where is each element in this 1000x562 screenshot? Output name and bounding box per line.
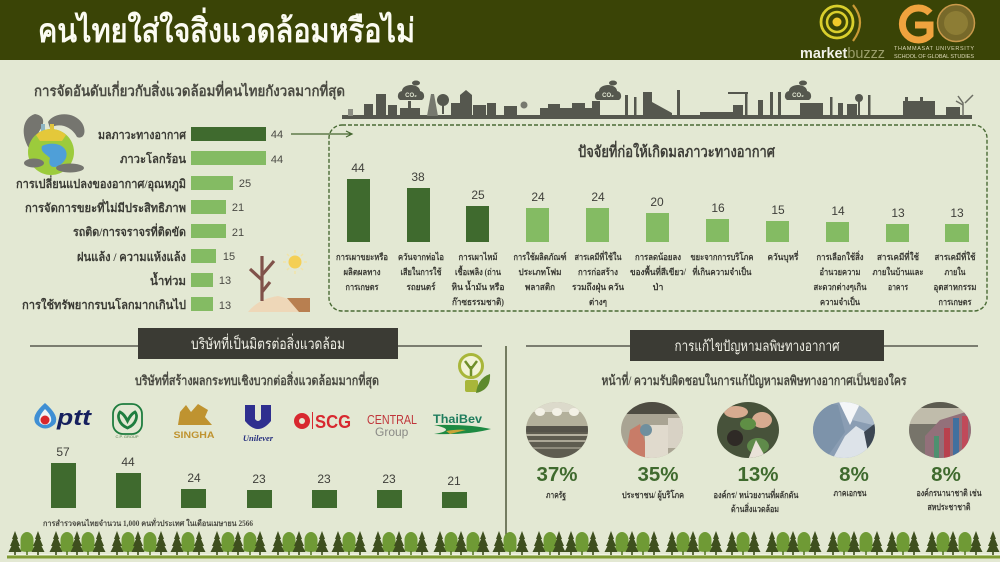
logo: Central Group: CENTRAL xyxy=(367,412,417,427)
factor 11: การเกษตร xyxy=(938,297,972,307)
logo: Central Group: Group xyxy=(375,425,409,439)
factor 11: สารเคมีที่ใช้ xyxy=(934,250,976,262)
factor 6 xyxy=(630,195,686,292)
bar PTT: 57 xyxy=(56,445,70,459)
section heading: eco-friendly companies xyxy=(138,328,398,359)
row 4: 21 xyxy=(232,202,244,214)
logo: Thammasat School of Global Studies xyxy=(894,4,974,60)
row 2 xyxy=(120,151,283,166)
factor 1: การเกษตร xyxy=(346,282,379,292)
icon: dry land xyxy=(248,250,310,312)
item: organisations: 13% xyxy=(737,463,779,486)
responsibility items xyxy=(525,400,982,514)
factor 10: สารเคมีที่ใช้ xyxy=(877,250,919,262)
logo: PTT xyxy=(34,403,93,430)
bar ThaiBev: 21 xyxy=(447,474,461,488)
logo: Unilever: Unilever xyxy=(243,433,274,443)
factor 6: การลดน้อยลง xyxy=(635,252,681,262)
city skyline illustration: CO₂ xyxy=(602,93,614,99)
factor 3: หิน น้ำมัน หรือ xyxy=(451,280,504,292)
logo: Central Group xyxy=(367,412,417,439)
factor 10: 13 xyxy=(891,206,905,220)
factor 7 xyxy=(690,201,754,277)
row 5 xyxy=(73,223,244,239)
factor 2 xyxy=(398,170,444,292)
logo: Thammasat School of Global Studies: THAMMASAT UNIVERSITY xyxy=(894,46,974,52)
row 4 xyxy=(25,199,244,215)
factor 7: ที่เกินความจำเป็น xyxy=(692,265,752,277)
factor 11: 13 xyxy=(950,206,964,220)
factor 9: 14 xyxy=(831,204,845,218)
icon: green bulb xyxy=(460,354,490,393)
factor 1: 44 xyxy=(351,161,365,175)
logo: CP Group xyxy=(113,404,142,439)
item: government: 37% xyxy=(536,463,578,486)
logo: Singha xyxy=(174,404,215,440)
bar SCG: 23 xyxy=(317,472,331,486)
factor 10: ภายในบ้านและ xyxy=(872,266,924,277)
factor 4: การใช้ผลิตภัณฑ์ xyxy=(514,251,566,262)
row 1: มลภาวะทางอากาศ xyxy=(98,128,186,142)
panel heading: ปัจจัยที่ก่อให้เกิดมลภาวะทางอากาศ xyxy=(578,140,776,161)
logo: SCG: SCG xyxy=(315,412,351,432)
section heading: air pollution solutions xyxy=(630,330,884,361)
row 1: 44 xyxy=(271,129,283,141)
item: public xyxy=(620,400,686,501)
row 1 xyxy=(98,127,283,142)
logo: ThaiBev: ThaiBev xyxy=(433,412,482,426)
row 4: การจัดการขยะที่ไม่มีประสิทธิภาพ xyxy=(25,199,186,215)
panel: causes of air pollution xyxy=(329,125,987,311)
company logos xyxy=(34,403,491,443)
factor 4: 24 xyxy=(531,190,545,204)
factor 5: การก่อสร้าง xyxy=(578,267,618,277)
factor 10: อาคาร xyxy=(888,282,908,292)
bar Singha xyxy=(181,471,206,508)
factor 5: 24 xyxy=(591,190,605,204)
row 6 xyxy=(77,249,235,264)
factor 1 xyxy=(336,161,388,292)
bar CP: 44 xyxy=(121,455,135,469)
item: government: ภาครัฐ xyxy=(546,490,566,501)
factor 9: สะดวกต่างๆเกิน xyxy=(814,282,867,293)
factor 8: 15 xyxy=(771,203,785,217)
subheading: responsibility: หน้าที่/ ความรับผิดชอบในการแก้ปัญหามลพิษทางอากาศเป็นของใคร xyxy=(602,371,907,389)
logo: Unilever xyxy=(243,405,274,443)
bar CP xyxy=(116,455,141,508)
factor 9: ความจำเป็น xyxy=(820,295,861,307)
title: คนไทยใส่ใจสิ่งแวดล้อมหรือไม่ xyxy=(38,7,415,50)
factor 6: ของพื้นที่สีเขียว/ xyxy=(630,265,686,277)
bar Unilever xyxy=(247,472,272,508)
logo: marketbuzzz: marketbuzzz xyxy=(800,45,885,62)
row 3: 25 xyxy=(239,178,251,190)
ranking heading: การจัดอันดับเกี่ยวกับสิ่งแวดล้อมที่คนไทยกังวลมากที่สุด xyxy=(34,80,345,100)
bar Unilever: 23 xyxy=(252,472,266,486)
chart: company scores xyxy=(51,445,467,508)
factor 7: ขยะจากการบริโภค xyxy=(690,251,754,262)
row 5: รถติด/การจราจรที่ติดขัด xyxy=(73,223,186,239)
section heading: eco-friendly companies: บริษัทที่เป็นมิตรต่อสิ่งแวดล้อม xyxy=(191,333,345,353)
item: public: 35% xyxy=(637,463,679,486)
row 3 xyxy=(16,175,251,192)
factor 5 xyxy=(572,190,625,308)
factor 1: การเผาขยะหรือ xyxy=(336,251,388,262)
logo: SCG xyxy=(294,412,351,432)
logo: CP Group: C.P. GROUP xyxy=(115,434,139,439)
bar Central: 23 xyxy=(382,472,396,486)
factor 8 xyxy=(766,203,799,263)
row 7 xyxy=(150,271,231,288)
factor 2: รถยนตร์ xyxy=(406,281,436,292)
factor 8: ควันบุหรี่ xyxy=(768,250,799,263)
row 7: น้ำท่วม xyxy=(150,271,186,288)
factor 9: การเลือกใช้สิ่ง xyxy=(816,250,864,262)
factor 4: ประเภทโฟม xyxy=(518,266,562,277)
subheading: companies: บริษัทที่สร้างผลกระทบเชิงบวกต่อสิ่งแวดล้อมมากที่สุด xyxy=(135,371,379,389)
item: public: ประชาชน/ ผู้บริโภค xyxy=(622,489,684,501)
row 6: 15 xyxy=(223,251,235,263)
bar SCG xyxy=(312,472,337,508)
factor 5: รวมถึงฝุ่น ควัน xyxy=(572,282,625,293)
factor 4 xyxy=(514,190,566,292)
logo: PTT: ptt xyxy=(56,405,93,430)
logo: ThaiBev xyxy=(433,412,491,434)
factor 5: สารเคมีที่ใช้ใน xyxy=(574,250,622,262)
city skyline illustration: CO₂ xyxy=(792,93,804,99)
item: organisations xyxy=(714,400,799,514)
bar Central xyxy=(377,472,402,508)
factor 11 xyxy=(934,206,977,307)
item: international bodies: องค์กรนานาชาติ เช่น xyxy=(916,487,982,498)
bar Singha: 24 xyxy=(187,471,201,485)
survey footnote: การสำรวจคนไทยจำนวน 1,000 คนทั่วประเทศ ในเดือนเมษายน 2566 xyxy=(43,517,253,528)
city skyline illustration: CO₂ xyxy=(405,93,417,99)
tree line xyxy=(7,531,1000,558)
factor 3: ก๊าซธรรมชาติ) xyxy=(452,297,504,307)
factor 3: เชื้อเพลิง (ถ่าน xyxy=(455,265,502,277)
item: organisations: องค์กร/ หน่วยงานที่ผลักดัน xyxy=(714,488,799,500)
row 8: 13 xyxy=(219,300,231,312)
item: government xyxy=(525,400,589,501)
item: organisations: ด้านสิ่งแวดล้อม xyxy=(731,502,779,514)
factor 11: ภายใน xyxy=(944,266,966,277)
section heading: air pollution solutions: การแก้ไขปัญหามลพิษทางอากาศ xyxy=(674,337,840,355)
factor 1: ผลิตผลทาง xyxy=(344,267,380,277)
factor 2: ควันจากท่อไอ xyxy=(398,251,444,262)
factor 11: อุตสาหกรรม xyxy=(934,282,977,293)
chart: environmental concerns ranking xyxy=(16,127,283,312)
factor 2: 38 xyxy=(411,170,425,184)
item: private sector: ภาคเอกชน xyxy=(834,488,867,498)
factor 2: เสียในการใช้ xyxy=(400,266,442,277)
row 5: 21 xyxy=(232,227,244,239)
factor 3: การเผาไหม้ xyxy=(458,251,498,262)
factor 9 xyxy=(814,204,867,307)
logo: Singha: SINGHA xyxy=(174,430,215,440)
item: international bodies: 8% xyxy=(931,463,961,486)
icon: polluted earth xyxy=(24,114,84,175)
factor 3: 25 xyxy=(471,188,485,202)
arrow to panel xyxy=(291,131,352,137)
row 6: ฝนแล้ง / ความแห้งแล้ง xyxy=(77,250,186,264)
row 8: การใช้ทรัพยากรบนโลกมากเกินไป xyxy=(22,297,186,312)
factor 6: ป่า xyxy=(653,282,663,292)
factor 9: อำนวยความ xyxy=(820,267,861,277)
row 7: 13 xyxy=(219,275,231,287)
city skyline illustration xyxy=(342,80,973,119)
item: private sector xyxy=(811,400,877,498)
factor 4: พลาสติก xyxy=(525,282,555,292)
row 3: การเปลี่ยนแปลงของอากาศ/อุณหภูมิ xyxy=(16,175,186,192)
row 2: ภาวะโลกร้อน xyxy=(120,151,187,166)
bar PTT xyxy=(51,445,76,508)
factor 10 xyxy=(872,206,924,292)
factor 6: 20 xyxy=(650,195,664,209)
factor 5: ต่างๆ xyxy=(589,297,607,308)
header band xyxy=(0,0,1000,60)
item: international bodies: สหประชาชาติ xyxy=(928,502,971,512)
logo: Thammasat School of Global Studies: SCHOOL OF GLOBAL STUDIES xyxy=(894,54,974,60)
row 2: 44 xyxy=(271,154,283,166)
item: private sector: 8% xyxy=(839,463,869,486)
item: international bodies xyxy=(907,400,982,512)
factor 3 xyxy=(451,188,504,307)
factor 7: 16 xyxy=(711,201,725,215)
bar ThaiBev xyxy=(442,474,467,508)
logo: marketbuzzz xyxy=(800,5,885,62)
